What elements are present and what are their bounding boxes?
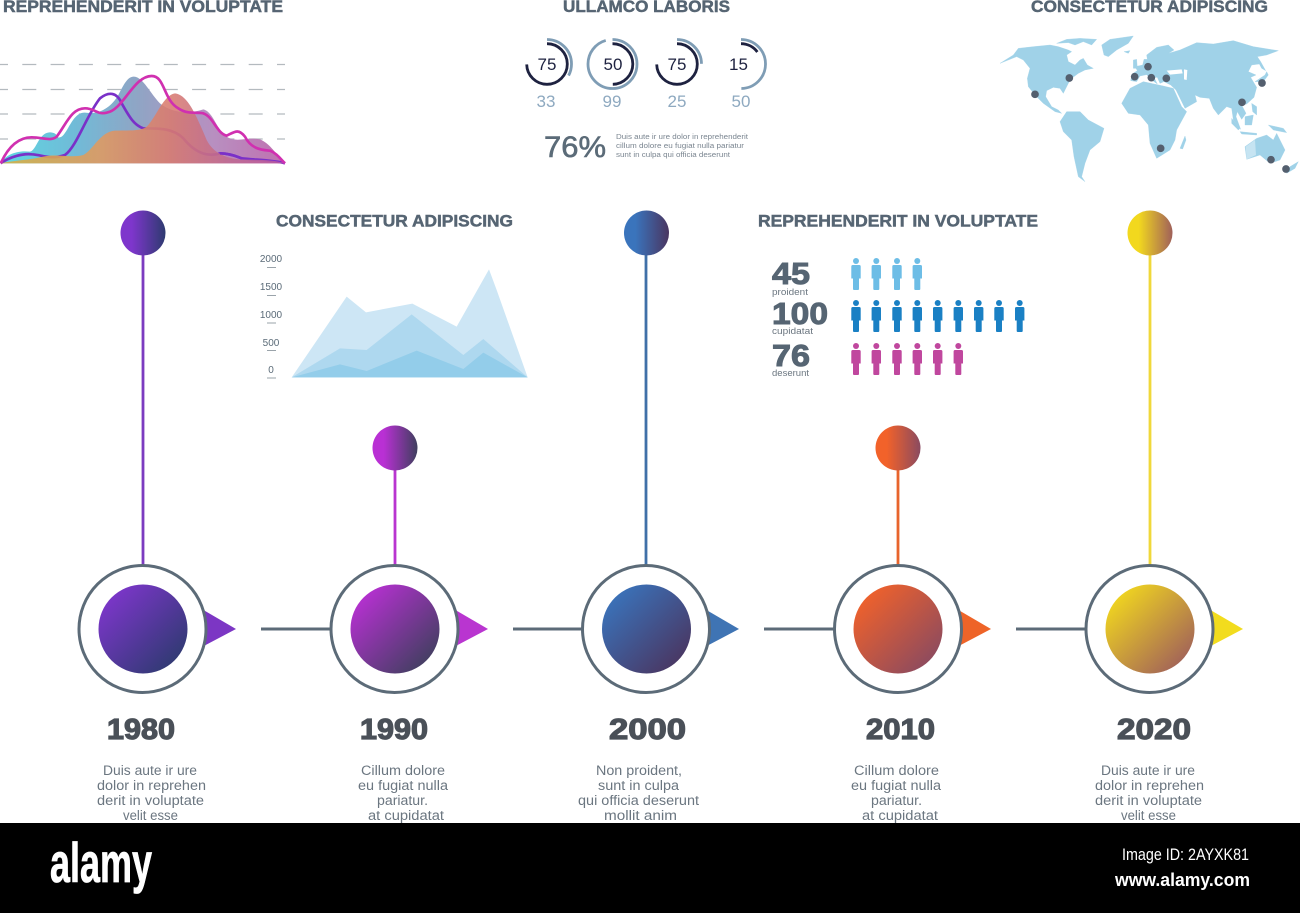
stem and top bubble xyxy=(120,210,166,565)
panel: smooth area chart xyxy=(0,0,285,163)
stem and top bubble xyxy=(372,426,418,565)
ring and gradient disc xyxy=(331,566,458,692)
chart: overlapping areas and lines xyxy=(0,64,285,163)
year: 1990 xyxy=(360,714,428,746)
panel: layered area chart xyxy=(260,212,528,378)
site url: www.alamy.com xyxy=(1114,870,1250,890)
donut gauge 75 / 33: 75 xyxy=(538,55,556,74)
panel: world map xyxy=(1000,0,1298,182)
description xyxy=(851,763,942,823)
description: dolor in reprehen xyxy=(1095,778,1204,793)
y axis labels: 2000 xyxy=(260,254,283,265)
description: qui officia deserunt xyxy=(578,793,699,808)
heading: consectetur adipiscing: CONSECTETUR ADIPISCING xyxy=(276,212,513,230)
ring and gradient disc xyxy=(1086,566,1213,692)
description: sunt in culpa xyxy=(598,778,680,793)
stat row: 76 deserunt: 76 xyxy=(772,338,810,373)
description xyxy=(358,763,449,823)
milestone: 2020 xyxy=(1086,210,1243,823)
donut gauge 75 / 25: 75 xyxy=(668,55,686,74)
description: eu fugiat nulla xyxy=(851,778,942,793)
donut gauge 15 / 50: 15 xyxy=(729,55,748,74)
ring and gradient disc xyxy=(834,566,962,692)
arrow xyxy=(1207,608,1243,648)
donut gauge 50 / 99: 50 xyxy=(604,55,622,74)
stem and top bubble xyxy=(624,210,669,565)
description: Duis aute ir ure xyxy=(103,763,197,778)
y axis labels: 1000 xyxy=(260,310,283,321)
y axis labels: 0 xyxy=(268,365,274,376)
stat row: 76 deserunt: deserunt xyxy=(772,368,810,378)
connector lines between milestones xyxy=(261,628,1086,630)
description xyxy=(1095,763,1204,823)
description: mollit anim xyxy=(604,808,677,823)
stat row: 100 cupidatat xyxy=(772,296,1024,336)
y axis labels: 1500 xyxy=(260,282,283,293)
stat row: 100 cupidatat: 100 xyxy=(772,296,828,331)
donut gauge 75 / 25: 25 xyxy=(668,92,686,111)
description: eu fugiat nulla xyxy=(358,778,449,793)
donut gauge 50 / 99 xyxy=(588,40,637,111)
milestone: 2000 xyxy=(578,210,739,823)
chart: stacked mountains xyxy=(292,269,528,377)
stat row: 100 cupidatat: cupidatat xyxy=(772,326,814,336)
description: at cupidatat xyxy=(368,808,444,823)
description: Cillum dolore xyxy=(854,763,939,778)
panel: donut gauges xyxy=(522,0,766,164)
year: 2000 xyxy=(609,714,686,746)
description: velit esse xyxy=(123,808,178,823)
description: pariatur. xyxy=(377,793,428,808)
stat row: 45 proident: 45 xyxy=(772,256,810,291)
description: derit in voluptate xyxy=(1095,793,1202,808)
arrow xyxy=(703,608,739,648)
stat row: 45 proident: proident xyxy=(772,287,809,297)
year: 2010 xyxy=(866,714,935,746)
description: Cillum dolore xyxy=(361,763,445,778)
donut gauge 75 / 25 xyxy=(652,40,702,111)
ring and gradient disc xyxy=(79,566,206,692)
heading: reprehenderit in voluptate: REPREHENDERIT IN VOLUPTATE xyxy=(758,212,1038,230)
donut gauge 75 / 33 xyxy=(522,40,572,111)
description xyxy=(97,763,206,823)
arrow xyxy=(955,608,991,648)
stem and top bubble xyxy=(876,426,920,565)
stat description text: cillum dolore eu fugiat nulla pariatur xyxy=(616,143,745,150)
stat: 76 percent: 76% xyxy=(544,131,606,164)
description: Duis aute ir ure xyxy=(1101,763,1195,778)
year: 2020 xyxy=(1117,714,1191,746)
y axis labels: 500 xyxy=(263,338,280,349)
description: Non proident, xyxy=(596,763,682,778)
y axis labels xyxy=(260,254,283,378)
donut gauge 75 / 33: 33 xyxy=(537,92,555,111)
donut gauge 50 / 99: 99 xyxy=(603,92,621,111)
description: at cupidatat xyxy=(862,808,938,823)
stem and top bubble xyxy=(1128,210,1172,565)
logo wordmark: alamy xyxy=(50,831,152,894)
stat description text: sunt in culpa qui officia deserunt xyxy=(616,152,730,159)
donut gauge 15 / 50: 50 xyxy=(732,92,750,111)
description: derit in voluptate xyxy=(97,793,204,808)
stat row: 45 proident xyxy=(772,256,922,297)
stat row: 76 deserunt xyxy=(772,338,963,378)
milestone: 1980 xyxy=(79,210,236,823)
description xyxy=(578,763,699,823)
map: continents and location dots xyxy=(1000,36,1298,182)
stat description text: Duis aute ir ure dolor in reprehenderit xyxy=(616,134,748,141)
stat description text xyxy=(616,134,748,159)
ring and gradient disc xyxy=(582,566,710,692)
image id: Image ID: 2AYXK81 xyxy=(1122,845,1249,864)
year: 1980 xyxy=(107,714,175,746)
arrow xyxy=(200,608,236,648)
milestone: 2010 xyxy=(834,426,991,823)
description: dolor in reprehen xyxy=(97,778,206,793)
description: pariatur. xyxy=(871,793,922,808)
milestone: 1990 xyxy=(331,426,488,823)
arrow xyxy=(452,608,488,648)
donut gauge 15 / 50 xyxy=(716,40,766,111)
footer: stock photo banner xyxy=(0,823,1300,913)
panel: people pictograms xyxy=(758,212,1038,378)
description: velit esse xyxy=(1121,808,1176,823)
